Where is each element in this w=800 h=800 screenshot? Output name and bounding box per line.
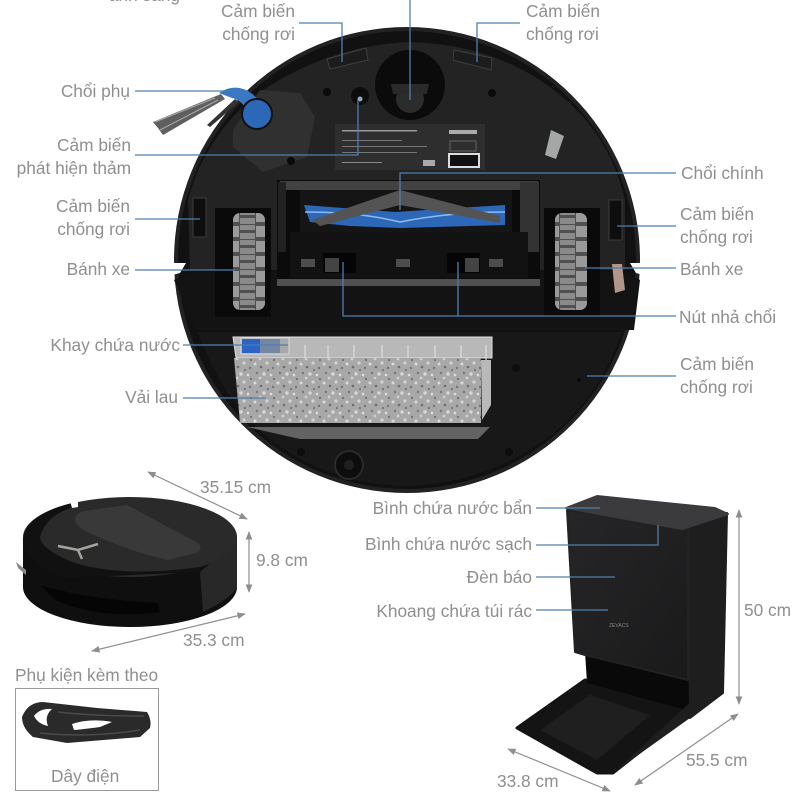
label: right cliff sensor: Cảm biến — [680, 204, 754, 224]
leader: carpet sensor — [135, 100, 358, 155]
cord label: Dây điện — [51, 766, 119, 786]
notch — [70, 498, 78, 508]
dimension: robot depth — [148, 472, 247, 519]
value: robot height: 9.8 cm — [256, 550, 308, 570]
leader: right cliff sensor — [617, 225, 676, 227]
label: mop cloth: Vải lau — [125, 387, 178, 407]
label: right wheel: Bánh xe — [680, 259, 743, 279]
robot cylinder — [23, 498, 237, 627]
robot perspective view — [16, 497, 237, 627]
top-right cliff sensor — [453, 50, 492, 70]
top surface — [23, 497, 237, 577]
accessories heading: Phụ kiện kèm theo — [15, 665, 158, 685]
leader: right wheel — [585, 267, 676, 269]
right side panel — [200, 540, 237, 612]
Y logo — [58, 544, 98, 559]
leader: top right cliff sensor — [477, 23, 520, 62]
leader: caster wheel — [409, 0, 411, 100]
side brush stub — [16, 562, 26, 575]
station logo: ZEVACS — [609, 623, 629, 629]
left wheel — [215, 208, 271, 317]
leader: main brush — [400, 173, 676, 210]
station front — [567, 510, 688, 680]
leader: left cliff sensor — [135, 218, 200, 220]
label: left cliff sensor: chống rơi — [57, 219, 130, 239]
station tray — [517, 680, 693, 773]
label: clean water tank: Bình chứa nước sạch — [365, 534, 532, 554]
docking station — [517, 496, 728, 773]
label: carpet sensor: Cảm biến — [57, 135, 131, 155]
label: rear cliff sensor: Cảm biến — [680, 354, 754, 374]
dimension: robot height — [248, 532, 250, 592]
left cliff sensor — [193, 198, 206, 237]
bumper crescent — [23, 503, 200, 578]
label: indicator light: Đèn báo — [467, 567, 532, 587]
leader: brush release button — [343, 262, 676, 316]
label: carpet sensor: phát hiện thảm — [17, 158, 131, 178]
leader: rear cliff sensor — [587, 375, 676, 377]
dimension: robot width — [92, 614, 245, 651]
dimension: station depth — [635, 714, 738, 785]
top-left cliff sensor — [327, 48, 368, 69]
brush release latches — [323, 253, 356, 273]
robot underside — [165, 27, 650, 493]
leader: water tank — [183, 344, 288, 346]
label: left cliff sensor: Cảm biến — [56, 196, 130, 216]
product label — [335, 124, 485, 170]
leader: top left cliff sensor — [299, 23, 342, 62]
right wheel — [544, 208, 600, 317]
station lid — [566, 496, 728, 529]
power cord — [22, 702, 151, 743]
caster wheel — [375, 50, 445, 120]
water tank — [233, 337, 492, 360]
carpet sensor — [351, 87, 369, 105]
value: station height: 50 cm — [744, 600, 791, 620]
label: main brush: Chổi chính — [681, 163, 764, 183]
label: top right cliff sensor: chống rơi — [526, 24, 599, 44]
recessed front slot — [40, 585, 160, 614]
leader: mop cloth — [183, 397, 266, 399]
label: top left cliff sensor: chống rơi — [222, 24, 295, 44]
side notches — [165, 263, 186, 277]
leader: indicator light — [536, 576, 615, 578]
label: top left cliff sensor: Cảm biến — [221, 1, 295, 21]
dimension: station height — [738, 510, 740, 704]
leader: dirty water tank — [536, 507, 600, 509]
side brush — [153, 88, 272, 135]
accessories box — [16, 688, 158, 790]
leader: side brush — [135, 90, 225, 92]
robot body — [174, 27, 640, 493]
station column — [585, 652, 693, 712]
label: rear cliff sensor: chống rơi — [680, 377, 753, 397]
lid — [75, 505, 201, 560]
dimension: station width — [508, 749, 610, 791]
dark recess behind side brush — [233, 90, 315, 172]
label: top right cliff sensor: Cảm biến — [526, 1, 600, 21]
copper sticker — [612, 264, 625, 293]
main brush bay — [277, 180, 540, 286]
leader: dust bag compartment — [536, 609, 608, 611]
label: dirty water tank: Bình chứa nước bẩn — [373, 498, 532, 518]
label: water tank: Khay chứa nước — [50, 335, 180, 355]
label: brush release button: Nút nhả chổi — [679, 307, 776, 327]
leader: clean water tank — [536, 525, 658, 545]
right cliff sensor — [609, 200, 622, 240]
rear camera lens — [335, 451, 363, 479]
value: robot depth: 35.15 cm — [200, 477, 271, 497]
leader: left wheel — [135, 269, 235, 271]
mop cloth — [234, 358, 491, 439]
main brush rod — [312, 190, 500, 226]
label: side brush: Chổi phụ — [61, 81, 130, 101]
value: robot width: 35.3 cm — [183, 630, 244, 650]
station side — [613, 513, 727, 773]
value: station width: 33.8 cm — [497, 771, 558, 791]
value: station depth: 55.5 cm — [686, 750, 747, 770]
label: dust bag compartment: Khoang chứa túi rác — [376, 601, 532, 621]
label: right cliff sensor: chống rơi — [680, 227, 753, 247]
label: left wheel: Bánh xe — [67, 259, 130, 279]
sticker — [545, 130, 564, 159]
